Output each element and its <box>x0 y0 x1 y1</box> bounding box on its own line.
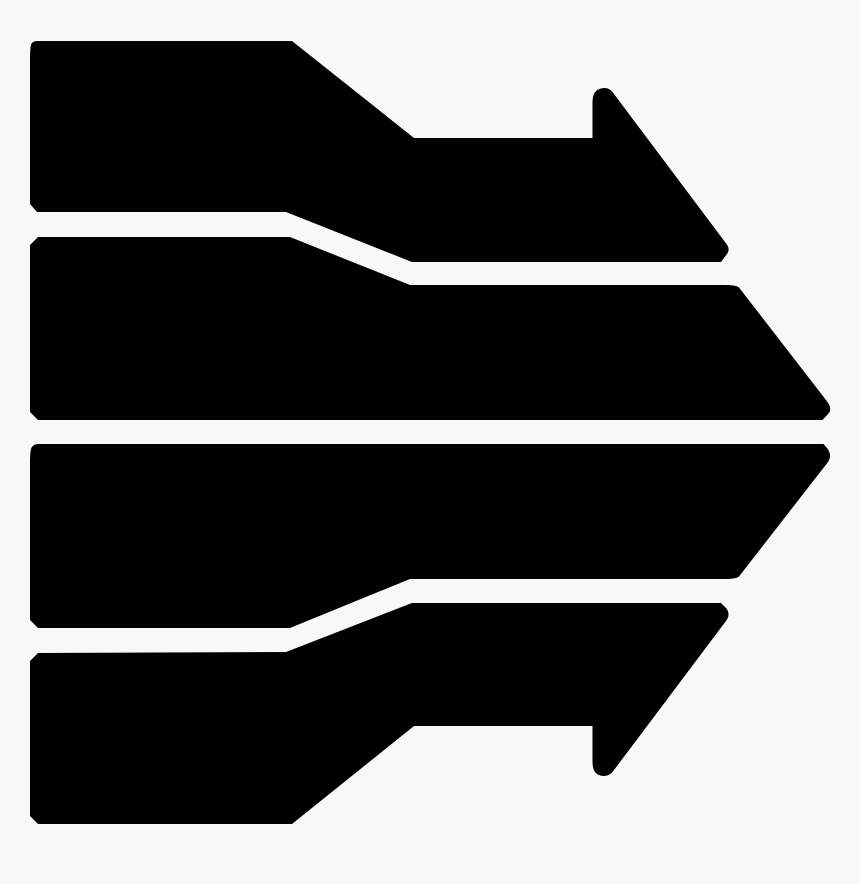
arrow: upper middle <box>30 237 830 420</box>
arrow: lower middle <box>30 444 830 628</box>
arrow: bottom <box>30 603 728 824</box>
arrow: top <box>30 41 729 262</box>
